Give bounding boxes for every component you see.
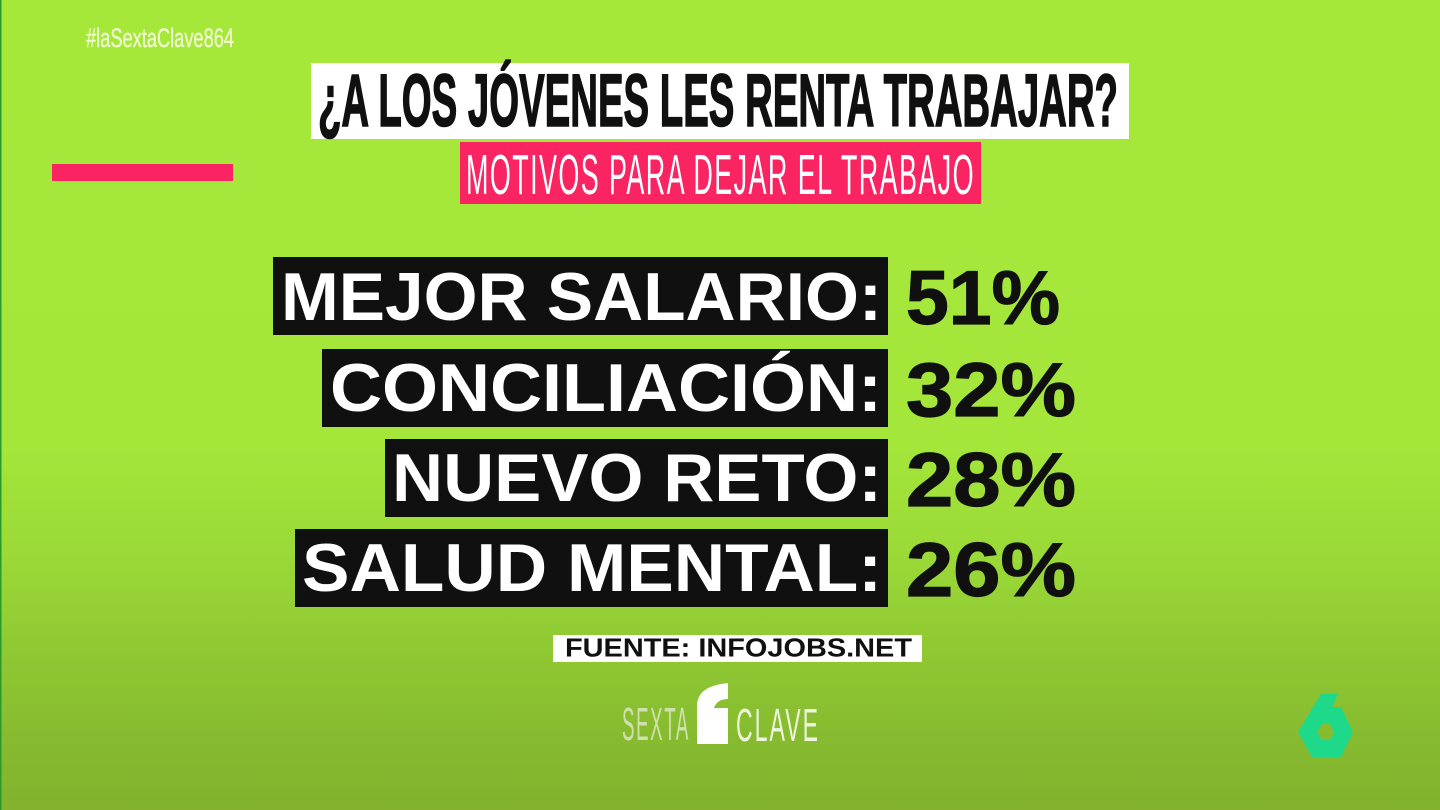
- subtitle: [460, 142, 981, 207]
- source: FUENTE: INFOJOBS.NET: [565, 632, 912, 662]
- label: mejor salario: MEJOR SALARIO:: [281, 259, 882, 335]
- row: conciliación: [322, 348, 1076, 433]
- value: 28%: 28%: [906, 438, 1076, 523]
- value: 26%: 26%: [906, 528, 1076, 613]
- logo: la Sexta Clave: CLAVE: [736, 699, 820, 751]
- label: salud mental: SALUD MENTAL:: [302, 530, 882, 606]
- accent bar: [52, 164, 233, 181]
- label: nuevo reto: NUEVO RETO:: [392, 440, 882, 516]
- row: salud mental: [295, 528, 1076, 613]
- row: mejor salario: [273, 256, 1060, 341]
- value: 51%: 51%: [906, 256, 1060, 341]
- logo: la Sexta Clave: [622, 683, 820, 751]
- hashtag: #laSextaClave864: [86, 23, 234, 53]
- label: conciliación: CONCILIACIÓN:: [330, 350, 882, 426]
- value: 32%: 32%: [906, 348, 1076, 433]
- row: nuevo reto: [385, 438, 1076, 523]
- logo: la Sexta Clave: SEXTA: [622, 698, 690, 750]
- icon: laSexta 6 logo: [1298, 694, 1353, 757]
